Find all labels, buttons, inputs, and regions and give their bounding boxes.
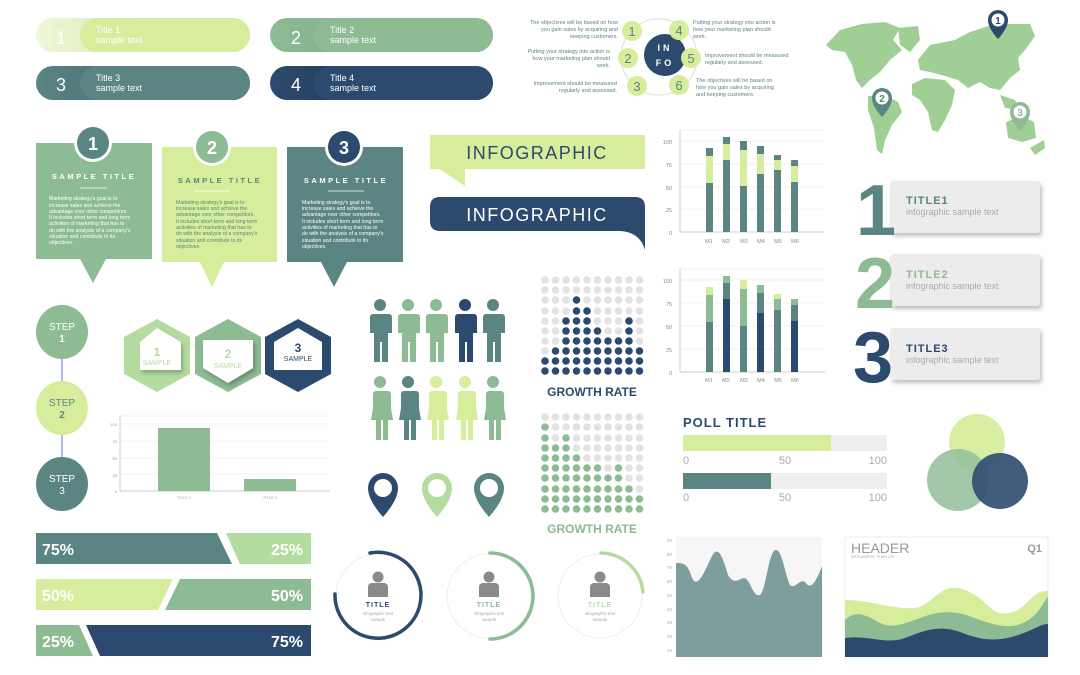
dot grid green	[541, 413, 643, 536]
info diagram: The objectives will be based on	[696, 78, 772, 84]
card 3: do with the analysis of a company's	[302, 231, 384, 237]
stacked bar chart 2: 50	[666, 325, 672, 331]
simple bar chart: 0	[115, 489, 118, 494]
map pin 2	[872, 88, 892, 117]
card 2: It includes short term and long term	[176, 219, 257, 225]
header wave chart: Q1	[1027, 543, 1042, 555]
steps timeline	[36, 305, 88, 511]
card 1: 1	[88, 134, 98, 154]
pill 3	[36, 66, 250, 100]
percent bar 2: 50%	[271, 588, 303, 605]
title row 2: TITLE2	[906, 269, 949, 281]
card 1: advantage over other competitors.	[49, 209, 128, 215]
poll: 100	[869, 455, 887, 467]
progress circle 1: TITLE	[366, 602, 390, 609]
percent bar 3: 75%	[271, 634, 303, 651]
simple bar chart: 50	[113, 456, 118, 461]
card 3: increase sales and achieve the	[302, 206, 373, 212]
stacked bar chart 2: M5	[774, 378, 782, 384]
progress circle 2: TITLE	[477, 602, 501, 609]
card 2: 2	[207, 138, 217, 158]
info diagram: 5	[687, 51, 695, 66]
simple bar chart: 25	[113, 473, 118, 478]
simple bar chart: TITLE 1	[177, 495, 192, 500]
stacked bar chart 2: M2	[722, 378, 730, 384]
pill 1: Title 1	[96, 25, 120, 35]
hexagon 3	[265, 319, 331, 392]
dot grid green: GROWTH RATE	[547, 522, 637, 536]
pill 2	[270, 18, 493, 52]
card 1: situation and contribute to its	[49, 234, 115, 240]
poll	[683, 415, 887, 504]
area chart: 90	[667, 538, 672, 543]
hexagon 1	[124, 319, 190, 392]
card 1: Marketing strategy's goal is to	[49, 196, 118, 202]
title row 2: infographic sample text	[906, 281, 999, 291]
info diagram: how you gain sales by acquiring	[696, 85, 774, 91]
area chart: 20	[667, 634, 672, 639]
stacked bar chart 1: M4	[757, 239, 765, 245]
progress circle 2: infographic text	[474, 611, 505, 616]
stacked bar chart 1: 25	[666, 208, 672, 214]
info diagram: Improvement should be measured	[705, 53, 788, 59]
progress circle 3	[558, 553, 643, 638]
steps timeline: 3	[59, 486, 65, 497]
pill 3: 3	[56, 75, 66, 95]
stacked bar chart 1: M6	[791, 239, 799, 245]
area chart: 70	[667, 565, 672, 570]
pill 4: sample text	[330, 83, 377, 93]
info diagram: 6	[675, 78, 683, 93]
card 2	[162, 128, 277, 287]
card 3: situation and contribute to its	[302, 238, 368, 244]
progress circle 1	[335, 552, 421, 638]
steps timeline: 1	[59, 334, 65, 345]
steps timeline: STEP	[49, 322, 75, 333]
title row 3	[853, 318, 1040, 398]
world map	[826, 22, 1045, 155]
percent bar 2	[36, 579, 311, 610]
stacked bar chart 1: 75	[666, 163, 672, 169]
card 2: situation and contribute to its	[176, 238, 242, 244]
info diagram: 4	[675, 23, 683, 38]
card 3: objectives.	[302, 244, 327, 250]
info diagram: keeping customers.	[570, 34, 618, 40]
card 2: objectives.	[176, 244, 201, 250]
pill 4	[270, 66, 493, 100]
card 3: It includes short term and long term	[302, 219, 383, 225]
location pins	[368, 473, 504, 517]
pill 1: sample text	[96, 35, 143, 45]
pill 3: Title 3	[96, 73, 120, 83]
map pin 3	[1010, 102, 1030, 131]
stacked bar chart 2	[663, 269, 825, 384]
card 2: do with the analysis of a company's	[176, 231, 258, 237]
hexagon 3: SAMPLE	[284, 356, 313, 363]
card 1: do with the analysis of a company's	[49, 228, 131, 234]
poll: 50	[779, 455, 791, 467]
info diagram: how your marketing plan should	[532, 56, 610, 62]
pill 2: sample text	[330, 35, 377, 45]
header wave chart	[845, 537, 1048, 657]
hexagon 1: SAMPLE	[143, 360, 172, 367]
info diagram: 1	[628, 24, 636, 39]
poll: 0	[683, 455, 689, 467]
percent bar 1: 75%	[42, 542, 74, 559]
poll: POLL TITLE	[683, 415, 767, 430]
card 2: activities of marketing that has to	[176, 225, 252, 231]
info diagram: The objectives will be based on how	[530, 20, 618, 26]
progress circle 3: infographic text	[585, 611, 616, 616]
pill 4: Title 4	[330, 73, 354, 83]
hexagon 2	[195, 319, 261, 392]
percent bar 1	[36, 533, 311, 564]
card 2: advantage over other competitors.	[176, 212, 255, 218]
title row 1: infographic sample text	[906, 207, 999, 217]
title row 2	[855, 244, 1040, 324]
infographic label navy: INFOGRAPHIC	[466, 205, 608, 225]
area chart: 40	[667, 607, 672, 612]
dot grid navy: GROWTH RATE	[547, 385, 637, 399]
infographic label light: INFOGRAPHIC	[466, 143, 608, 163]
stacked bar chart 1: M1	[705, 239, 713, 245]
pill 2: Title 2	[330, 25, 354, 35]
card 3: Marketing strategy's goal is to	[302, 200, 371, 206]
people women row	[371, 376, 506, 440]
hexagon 3: 3	[295, 341, 302, 355]
title row 1	[856, 171, 1040, 251]
progress circle 2	[447, 553, 533, 639]
card 3	[287, 128, 403, 287]
pill 3: sample text	[96, 83, 143, 93]
people men row	[370, 299, 505, 362]
stacked bar chart 2: M4	[757, 378, 765, 384]
simple bar chart	[110, 415, 330, 500]
info diagram: Putting your strategy into action is	[527, 49, 610, 55]
dot grid navy	[541, 276, 643, 399]
infographic label light	[430, 135, 645, 186]
area chart: 30	[667, 620, 672, 625]
poll: 0	[683, 492, 689, 504]
map pin 1: 1	[995, 16, 1001, 27]
infographic label navy	[430, 197, 645, 250]
stacked bar chart 1: 100	[663, 140, 672, 146]
info diagram: Putting your strategy into action is	[693, 20, 776, 26]
percent bar 3	[36, 625, 311, 656]
area chart: 60	[667, 579, 672, 584]
card 1: SAMPLE TITLE	[52, 172, 136, 181]
percent bar 1: 25%	[271, 542, 303, 559]
card 2: increase sales and achieve the	[176, 206, 247, 212]
progress circle 3: sample	[593, 617, 608, 622]
venn	[927, 414, 1028, 511]
progress circle 3: TITLE	[588, 602, 612, 609]
info diagram: work.	[596, 63, 610, 69]
card 3: activities of marketing that has to	[302, 225, 378, 231]
percent bar 2: 50%	[42, 588, 74, 605]
card 1	[36, 124, 152, 283]
steps timeline: 2	[59, 410, 65, 421]
card 3: 3	[339, 138, 349, 158]
info diagram: you gain sales by acquiring and	[541, 27, 618, 33]
title row 1: 1	[856, 171, 896, 251]
percent bar 3: 25%	[42, 634, 74, 651]
stacked bar chart 2: 75	[666, 302, 672, 308]
title row 2: 2	[855, 244, 895, 324]
stacked bar chart 1: 50	[666, 186, 672, 192]
map pin 3: 3	[1017, 108, 1023, 119]
stacked bar chart 1: M3	[740, 239, 748, 245]
info diagram: regularly and assessed.	[559, 88, 617, 94]
info diagram: how your marketing plan should	[693, 27, 771, 33]
card 1: objectives.	[49, 240, 74, 246]
poll: 50	[779, 492, 791, 504]
stacked bar chart 1: M5	[774, 239, 782, 245]
card 2: Marketing strategy's goal is to	[176, 200, 245, 206]
steps timeline: STEP	[49, 398, 75, 409]
stacked bar chart 1: M2	[722, 239, 730, 245]
stacked bar chart 2: 100	[663, 279, 672, 285]
map pin 1	[988, 10, 1008, 39]
info diagram: and keeping customers.	[696, 92, 755, 98]
card 1: It includes short term and long term	[49, 215, 130, 221]
pill 2: 2	[291, 28, 301, 48]
progress circle 1: sample	[371, 617, 386, 622]
card 1: activities of marketing that has to	[49, 221, 125, 227]
progress circle 1: infographic text	[363, 611, 394, 616]
stacked bar chart 2: 25	[666, 348, 672, 354]
simple bar chart: 100	[110, 422, 118, 427]
header wave chart: INFOGRAPHIC TEMPLATE	[851, 555, 895, 559]
progress circle 2: sample	[482, 617, 497, 622]
map pin 2: 2	[879, 94, 885, 105]
pill 1	[36, 18, 250, 52]
card 3: SAMPLE TITLE	[304, 176, 388, 185]
stacked bar chart 2: M1	[705, 378, 713, 384]
simple bar chart: TITLE 2	[263, 495, 278, 500]
info diagram: IN	[658, 43, 672, 53]
card 2: SAMPLE TITLE	[178, 176, 262, 185]
header wave chart: HEADER	[851, 540, 909, 556]
hexagon 2: 2	[225, 347, 232, 361]
stacked bar chart 2: 0	[669, 371, 672, 377]
info diagram: FO	[656, 58, 674, 68]
info diagram: 3	[633, 79, 641, 94]
area chart	[667, 537, 822, 657]
title row 3: 3	[853, 318, 893, 398]
stacked bar chart 1: 0	[669, 231, 672, 237]
info diagram: regularly and assessed.	[705, 60, 764, 66]
steps timeline: STEP	[49, 474, 75, 485]
info diagram	[527, 19, 788, 98]
title row 3: infographic sample text	[906, 355, 999, 365]
area chart: 50	[667, 593, 672, 598]
hexagon 2: SAMPLE	[214, 363, 243, 370]
stacked bar chart 1	[663, 130, 825, 245]
pill 4: 4	[291, 75, 301, 95]
hexagon 1: 1	[154, 345, 161, 359]
area chart: 10	[667, 648, 672, 653]
title row 3: TITLE3	[906, 343, 949, 355]
title row 1: TITLE1	[906, 195, 949, 207]
info diagram: Improvement should be measured	[534, 81, 617, 87]
info diagram: 2	[624, 51, 632, 66]
pill 1: 1	[56, 28, 66, 48]
area chart: 80	[667, 552, 672, 557]
simple bar chart: 75	[113, 439, 118, 444]
card 1: increase sales and achieve the	[49, 203, 120, 209]
card 3: advantage over other competitors.	[302, 212, 381, 218]
stacked bar chart 2: M3	[740, 378, 748, 384]
stacked bar chart 2: M6	[791, 378, 799, 384]
info diagram: work.	[692, 34, 707, 40]
poll: 100	[869, 492, 887, 504]
